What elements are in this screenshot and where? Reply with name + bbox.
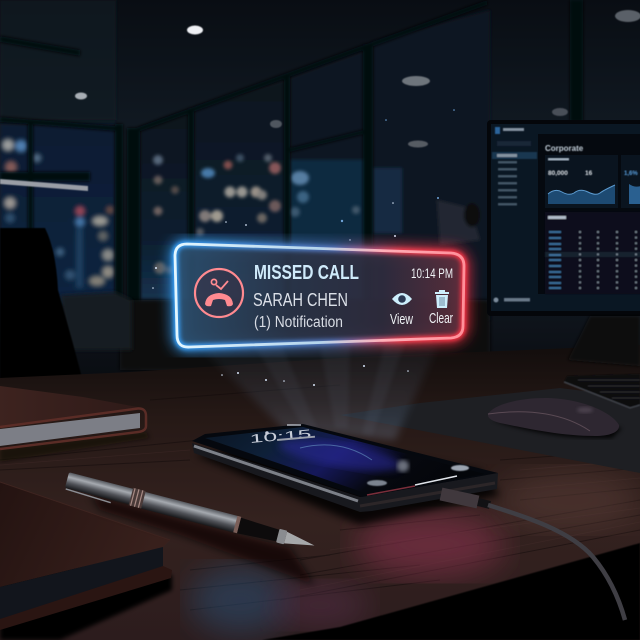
- phone clock: 10:15: [249, 427, 313, 446]
- left city window: [0, 0, 116, 304]
- desk front edge: [262, 543, 640, 640]
- monitor: Corporate: [545, 144, 584, 153]
- fountain pen: [64, 471, 317, 585]
- heading: missed call: MISSED CALL: [254, 261, 359, 284]
- notebook upper left: [0, 386, 150, 462]
- dashboard chart card: [545, 155, 618, 208]
- caller name: SARAH CHEN: [253, 290, 348, 310]
- office chair: [0, 228, 84, 385]
- charging cable: [441, 494, 625, 620]
- dashboard chart card: 80,000: [548, 170, 568, 177]
- missed call icon: [195, 269, 243, 317]
- floating particles: [152, 109, 455, 386]
- phone screen: [205, 424, 485, 495]
- city bokeh lights: [153, 154, 360, 274]
- notebook lower left: [0, 482, 172, 640]
- notification count: (1) Notification: [254, 314, 343, 331]
- view action: View: [390, 312, 413, 328]
- window wall panes: [140, 10, 490, 320]
- timestamp: 10:14 PM: [411, 265, 453, 281]
- wall lamp strip: [0, 179, 88, 191]
- smartphone: [192, 424, 500, 525]
- dashboard right card: [621, 155, 640, 208]
- monitor stand: [568, 316, 640, 366]
- dashboard chart card: 16: [585, 170, 593, 177]
- clear action: Clear: [429, 311, 453, 327]
- missed call notification panel: [175, 244, 464, 347]
- hologram light beam: [198, 340, 440, 440]
- desk: [0, 345, 640, 640]
- room floor shadow: [120, 300, 490, 370]
- sofa: [60, 292, 132, 350]
- dashboard right card: 1,6%: [624, 171, 638, 177]
- monitor: [487, 120, 640, 316]
- keyboard: [564, 374, 640, 408]
- clear action: [429, 290, 453, 327]
- mouse: [488, 398, 622, 438]
- window frames: [0, 0, 583, 368]
- mouse pad: [340, 388, 640, 473]
- dashboard main: [538, 134, 640, 294]
- office background: [0, 0, 640, 400]
- dashboard sidebar: [492, 127, 537, 302]
- view action: [390, 293, 413, 328]
- ceiling lights: [75, 10, 640, 148]
- dashboard table: [545, 212, 640, 294]
